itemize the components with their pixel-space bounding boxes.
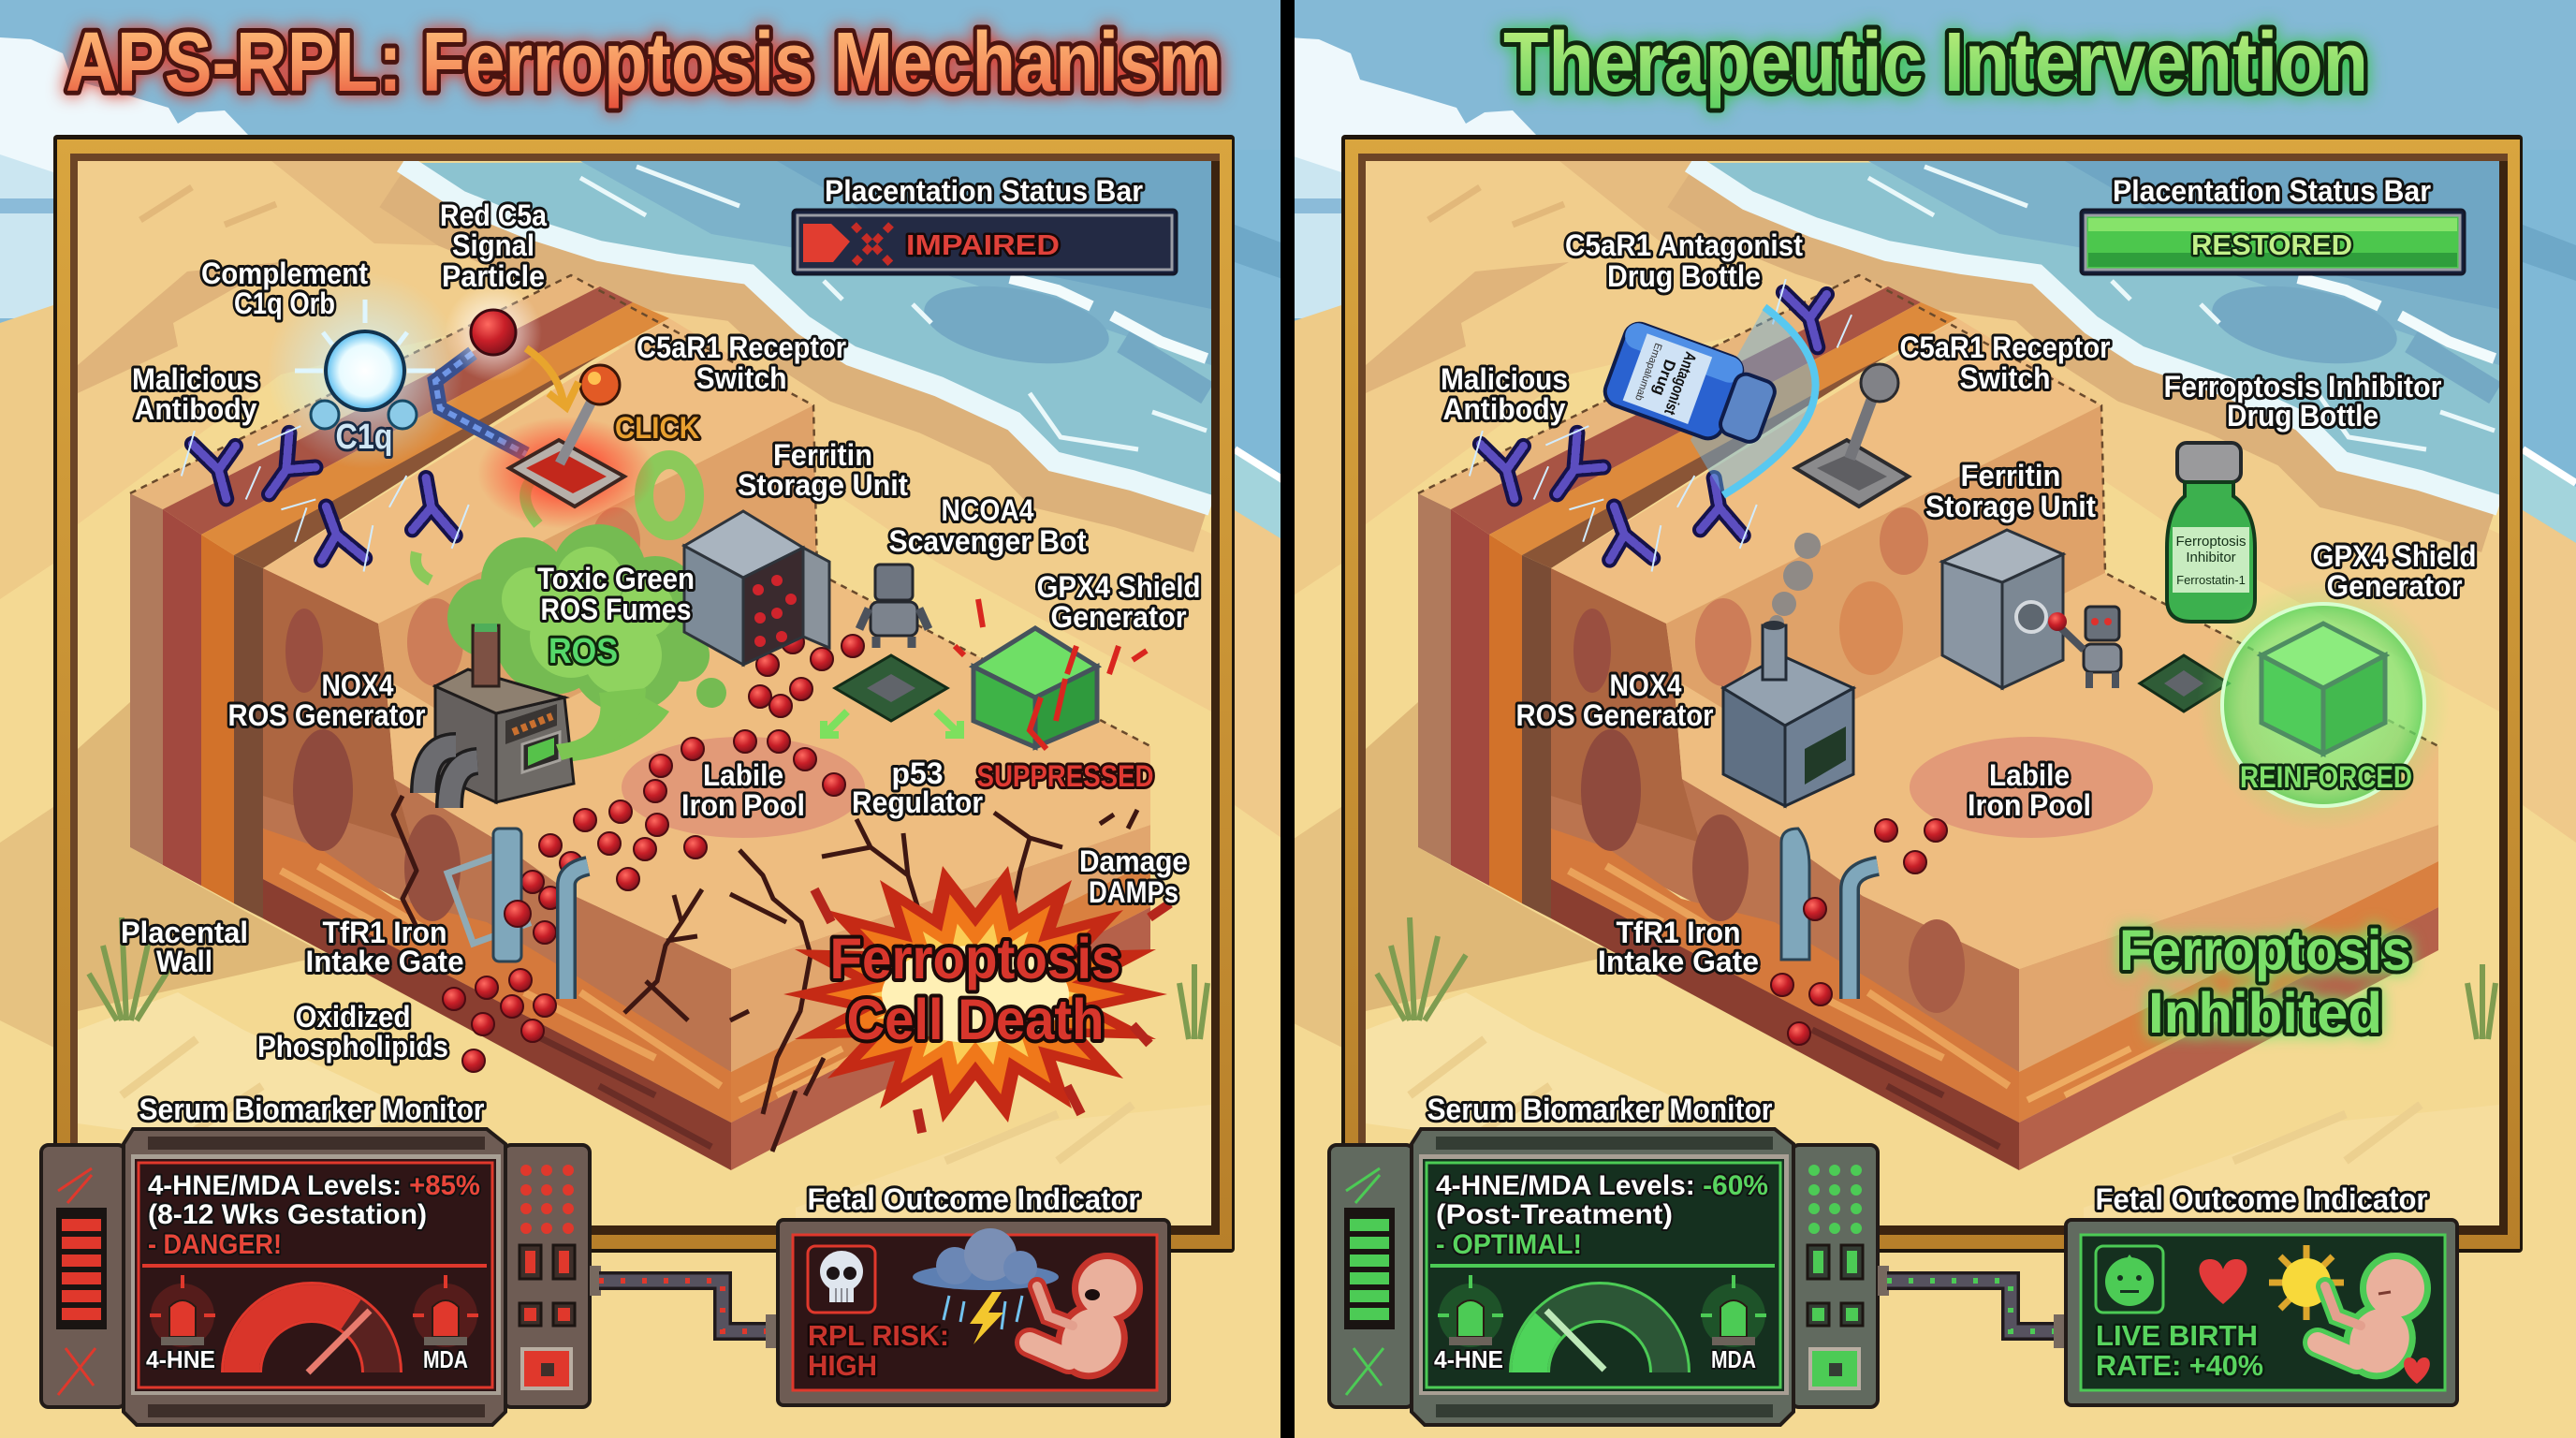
label: ferroptosis cell death: Ferroptosis xyxy=(829,927,1121,990)
shield arc xyxy=(1690,307,1816,495)
label: TfR1: Intake Gate xyxy=(305,945,464,978)
label: TfR1: TfR1 Iron xyxy=(322,916,447,949)
label: complement xyxy=(201,257,368,320)
label: ferritin: Storage Unit xyxy=(1925,490,2096,523)
label: GPX4: GPX4 Shield xyxy=(1037,570,1200,604)
label: ferritin: Storage Unit xyxy=(738,468,908,502)
heading: fetal outcome: Fetal Outcome Indicator xyxy=(807,1182,1140,1216)
label: p53: p53 xyxy=(891,756,944,790)
C5aR1 antagonist drug bottle: Drug xyxy=(1649,358,1679,398)
C5aR1 receptor switch activated xyxy=(477,365,655,529)
monitor readout: - DANGER! xyxy=(148,1229,282,1260)
label: click: CLICK xyxy=(615,411,699,445)
heading: serum biomarker: Serum Biomarker Monitor xyxy=(139,1093,485,1126)
ferroptosis inhibitor drug bottle: Ferroptosis xyxy=(2175,534,2247,550)
label: labile iron xyxy=(1968,758,2091,822)
label: NCOA4: NCOA4 xyxy=(942,493,1034,527)
label: toxic fumes: ROS Fumes xyxy=(541,593,691,626)
icon: small heart xyxy=(2404,1357,2430,1384)
iron particles reduced xyxy=(1771,819,1947,1045)
label: NCOA4: Scavenger Bot xyxy=(889,524,1087,558)
ferritin safe closed xyxy=(1942,530,2063,688)
receptor switch inactive xyxy=(1795,364,1909,506)
label: placental wall xyxy=(121,916,248,978)
label: oxidized phospholipids: Oxidized xyxy=(296,1000,410,1034)
beach scene xyxy=(1288,0,2576,1438)
status bar restored: RESTORED xyxy=(2191,228,2352,261)
monitor readout xyxy=(148,1170,480,1260)
grey smoke xyxy=(1769,533,1821,630)
label: malicious antibody: Antibody xyxy=(1443,392,1566,426)
label: NOX4: NOX4 xyxy=(322,668,394,702)
gauge xyxy=(1530,1302,1670,1372)
label: ROS: ROS xyxy=(549,632,618,671)
label: malicious antibody: Malicious xyxy=(132,362,259,396)
panel: APS-RPL ferroptosis mechanism xyxy=(0,0,1288,1438)
label: red C5a xyxy=(440,198,547,293)
label: TfR1: TfR1 Iron xyxy=(1616,916,1741,949)
status bar restored xyxy=(2081,210,2465,274)
wall cell xyxy=(1909,919,1965,1013)
GPX4 shield reinforced xyxy=(2197,579,2450,831)
label: labile iron: Labile xyxy=(1989,758,2070,792)
label: oxidized phospholipids: Phospholipids xyxy=(257,1030,448,1064)
label: red C5a: Red C5a xyxy=(440,198,547,232)
gauge labels: 4-HNE xyxy=(1434,1345,1503,1373)
C5aR1 antagonist drug bottle: Antagonist xyxy=(1661,349,1700,418)
malicious antibodies xyxy=(181,425,470,572)
golden frame xyxy=(1341,135,2523,1253)
red C5a signal particle xyxy=(447,288,539,378)
icon: sun xyxy=(2269,1245,2344,1320)
label: GPX4: Generator xyxy=(2327,569,2462,603)
label: NOX4: ROS Generator xyxy=(1516,698,1713,732)
label: ferroptosis inhibited: Inhibited xyxy=(2148,981,2382,1045)
label: TfR1 xyxy=(1598,916,1759,978)
ferroptosis inhibitor drug bottle xyxy=(2167,443,2255,622)
icon: storm cloud xyxy=(913,1228,1059,1344)
golden frame xyxy=(53,135,1235,1253)
label: placental wall: Wall xyxy=(156,945,212,978)
label: ferritin xyxy=(738,438,908,502)
ferroptosis inhibitor drug bottle: Ferrostatin-1 xyxy=(2176,573,2246,587)
extra antibody xyxy=(1763,265,1859,362)
heading: placentation status: Placentation Status Bar xyxy=(825,174,1143,208)
GPX4 shield generator suppressed xyxy=(955,599,1147,749)
label: toxic fumes xyxy=(537,562,695,626)
label: red C5a: Particle xyxy=(442,259,545,293)
gauge labels: 4-HNE xyxy=(146,1345,215,1373)
label: ferritin: Ferritin xyxy=(1960,459,2061,492)
label: labile iron: Labile xyxy=(703,758,783,792)
fetal risk text xyxy=(808,1319,949,1382)
label: DAMPs: DAMPs xyxy=(1089,875,1178,909)
ferroptosis explosion xyxy=(783,866,1170,1133)
label: ferroptosis inhibited: Ferroptosis xyxy=(2119,918,2411,982)
label: TfR1: Intake Gate xyxy=(1598,945,1759,978)
icon: fetus healthy xyxy=(2318,1259,2424,1383)
label: C1q: C1q xyxy=(335,418,393,457)
label: receptor switch: Switch xyxy=(1960,361,2050,395)
gauge labels xyxy=(146,1345,468,1373)
p53 chip xyxy=(2140,655,2229,712)
NOX4 ROS generator xyxy=(424,624,646,808)
label: NOX4 xyxy=(1516,668,1713,732)
label: malicious antibody: Malicious xyxy=(1441,362,1568,396)
label: GPX4 xyxy=(1037,570,1200,634)
labile iron pool particles xyxy=(443,631,864,1072)
NCOA4 scavenger bot xyxy=(859,565,929,648)
status bar impaired xyxy=(793,210,1177,274)
label: NOX4: ROS Generator xyxy=(228,698,425,732)
label: antagonist bottle xyxy=(1565,228,1803,293)
label: receptor switch xyxy=(1900,330,2110,395)
NOX4 generator inactive xyxy=(1723,621,1853,806)
TfR1 gate narrowed xyxy=(1781,829,1878,999)
label: ferritin xyxy=(1925,459,2096,523)
complement C1q orb xyxy=(275,281,459,464)
placental block terrain xyxy=(130,275,1150,1170)
fetal outcome text xyxy=(2096,1319,2263,1382)
C5aR1 antagonist drug bottle xyxy=(1601,319,1781,455)
fetal outcome text: RATE: +40% xyxy=(2096,1349,2263,1382)
arrow: signal to switch xyxy=(526,348,578,407)
label: complement: Complement xyxy=(201,257,368,290)
label: p53: Regulator xyxy=(852,785,983,819)
label: red C5a: Signal xyxy=(452,228,534,262)
fetal risk text: RPL RISK: xyxy=(808,1319,949,1352)
p53 regulator chip xyxy=(824,655,960,735)
label: GPX4: Generator xyxy=(1050,600,1187,634)
label: ferroptosis inhibited xyxy=(2119,918,2411,1045)
label: labile iron xyxy=(681,758,805,822)
TfR1 iron intake gate xyxy=(447,829,588,999)
icon: heart xyxy=(2199,1259,2247,1304)
label: C5aR1 switch xyxy=(637,330,846,395)
monitor readout: 4-HNE/MDA Levels: +85% xyxy=(148,1170,480,1201)
label: labile iron: Iron Pool xyxy=(1968,788,2091,822)
toxic green ROS fumes xyxy=(416,460,726,763)
label: ferroptosis inhibitor: Drug Bottle xyxy=(2227,399,2378,433)
icon: fetus distressed xyxy=(1030,1259,1136,1383)
label: TfR1 xyxy=(305,916,464,978)
label: ferroptosis inhibitor xyxy=(2164,370,2441,433)
placental block terrain xyxy=(1418,275,2438,1170)
label: p53 xyxy=(852,756,983,819)
monitor and fetal panel chassis xyxy=(41,1129,1169,1425)
label: complement: C1q Orb xyxy=(234,286,335,320)
malicious antibodies xyxy=(1459,412,1764,590)
label: ferroptosis inhibitor: Ferroptosis Inhibitor xyxy=(2164,370,2441,404)
scavenger bot with iron xyxy=(2048,607,2121,688)
heading: serum biomarker: Serum Biomarker Monitor xyxy=(1427,1093,1773,1126)
label: C5aR1 switch: C5aR1 Receptor xyxy=(637,330,846,364)
label: NOX4 xyxy=(228,668,425,732)
label: C5aR1 switch: Switch xyxy=(696,361,786,395)
heading: placentation status: Placentation Status Bar xyxy=(2113,174,2431,208)
gauge xyxy=(242,1302,382,1372)
monitor readout xyxy=(1436,1170,1768,1260)
status bar impaired: IMPAIRED xyxy=(906,228,1060,261)
label: GPX4: GPX4 Shield xyxy=(2312,539,2477,573)
icon: skull xyxy=(820,1251,863,1302)
fetal risk text: HIGH xyxy=(808,1349,877,1382)
monitor readout: (Post-Treatment) xyxy=(1436,1199,1673,1230)
label: malicious antibody xyxy=(1441,362,1568,426)
heading: fetal outcome: Fetal Outcome Indicator xyxy=(2095,1182,2428,1216)
gauge labels: MDA xyxy=(1711,1345,1756,1373)
label: toxic fumes: Toxic Green xyxy=(537,562,695,595)
tissue cracks xyxy=(393,796,1137,1152)
ferritin storage unit open xyxy=(684,511,829,665)
label: ferroptosis cell death: Cell Death xyxy=(846,988,1105,1051)
title: APS-RPL: Ferroptosis Mechanism xyxy=(66,16,1222,110)
monitor readout: - OPTIMAL! xyxy=(1436,1229,1582,1260)
label: antagonist bottle: C5aR1 Antagonist xyxy=(1565,228,1803,262)
gauge labels: MDA xyxy=(423,1345,468,1373)
gauge labels xyxy=(1434,1345,1756,1373)
label: DAMPs xyxy=(1079,844,1188,909)
label: malicious antibody: Antibody xyxy=(135,392,257,426)
label: DAMPs: Damage xyxy=(1079,844,1188,878)
label: reinforced: REINFORCED xyxy=(2240,760,2412,794)
monitor and fetal panel chassis xyxy=(1329,1129,2457,1425)
label: labile iron: Iron Pool xyxy=(681,788,805,822)
label: suppressed: SUPPRESSED xyxy=(977,759,1153,793)
ferroptosis inhibitor drug bottle: Inhibitor xyxy=(2186,550,2236,565)
C5aR1 antagonist drug bottle: Emapalumab xyxy=(1632,342,1663,403)
label: antagonist bottle: Drug Bottle xyxy=(1607,259,1761,293)
label: ferroptosis cell death xyxy=(829,927,1121,1051)
panel: therapeutic intervention xyxy=(1288,0,2576,1438)
label: GPX4 xyxy=(2312,539,2477,603)
label: receptor switch: C5aR1 Receptor xyxy=(1900,330,2110,364)
label: malicious antibody xyxy=(132,362,259,426)
label: placental wall: Placental xyxy=(121,916,248,949)
fetal outcome text: LIVE BIRTH xyxy=(2096,1319,2258,1352)
label: ferritin: Ferritin xyxy=(773,438,872,472)
icon: healthy face xyxy=(2105,1255,2154,1306)
divider xyxy=(1281,0,1295,1438)
monitor readout: 4-HNE/MDA Levels: -60% xyxy=(1436,1170,1768,1201)
title: Therapeutic Intervention xyxy=(1503,16,2368,110)
signal connector xyxy=(435,353,526,454)
monitor readout: (8-12 Wks Gestation) xyxy=(148,1199,427,1230)
label: oxidized phospholipids xyxy=(257,1000,448,1064)
beach scene xyxy=(0,0,1288,1438)
label: NCOA4 xyxy=(889,493,1087,558)
label: NOX4: NOX4 xyxy=(1610,668,1682,702)
